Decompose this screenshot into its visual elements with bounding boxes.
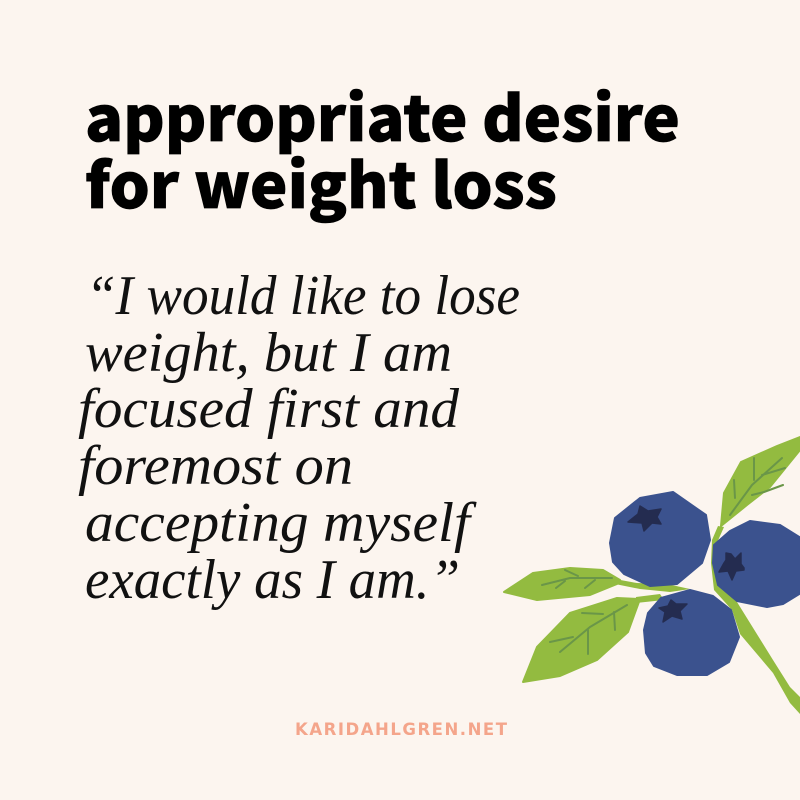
stem — [711, 526, 800, 714]
quote text: “I would like to lose — [86, 265, 520, 327]
footer website: KARIDAHLGREN.NET — [295, 720, 508, 739]
berry: right — [713, 521, 800, 607]
quote text: foremost on — [78, 435, 353, 497]
title: appropriate desire — [85, 69, 680, 159]
quote text — [78, 265, 520, 611]
leaf: upper right — [721, 437, 800, 526]
title: for weight loss — [85, 136, 557, 226]
stem branches — [615, 579, 690, 592]
quote text: weight, but I am — [85, 322, 452, 384]
title — [85, 69, 680, 226]
berry: bottom — [644, 590, 739, 675]
berry: top left — [610, 492, 710, 586]
blueberry branch illustration — [504, 437, 800, 714]
quote text: focused first and — [78, 378, 460, 440]
leaf: upper left — [504, 568, 620, 600]
leaf: lower left — [523, 598, 640, 682]
quote text: accepting myself — [85, 492, 478, 554]
quote text: exactly as I am.” — [85, 549, 460, 611]
